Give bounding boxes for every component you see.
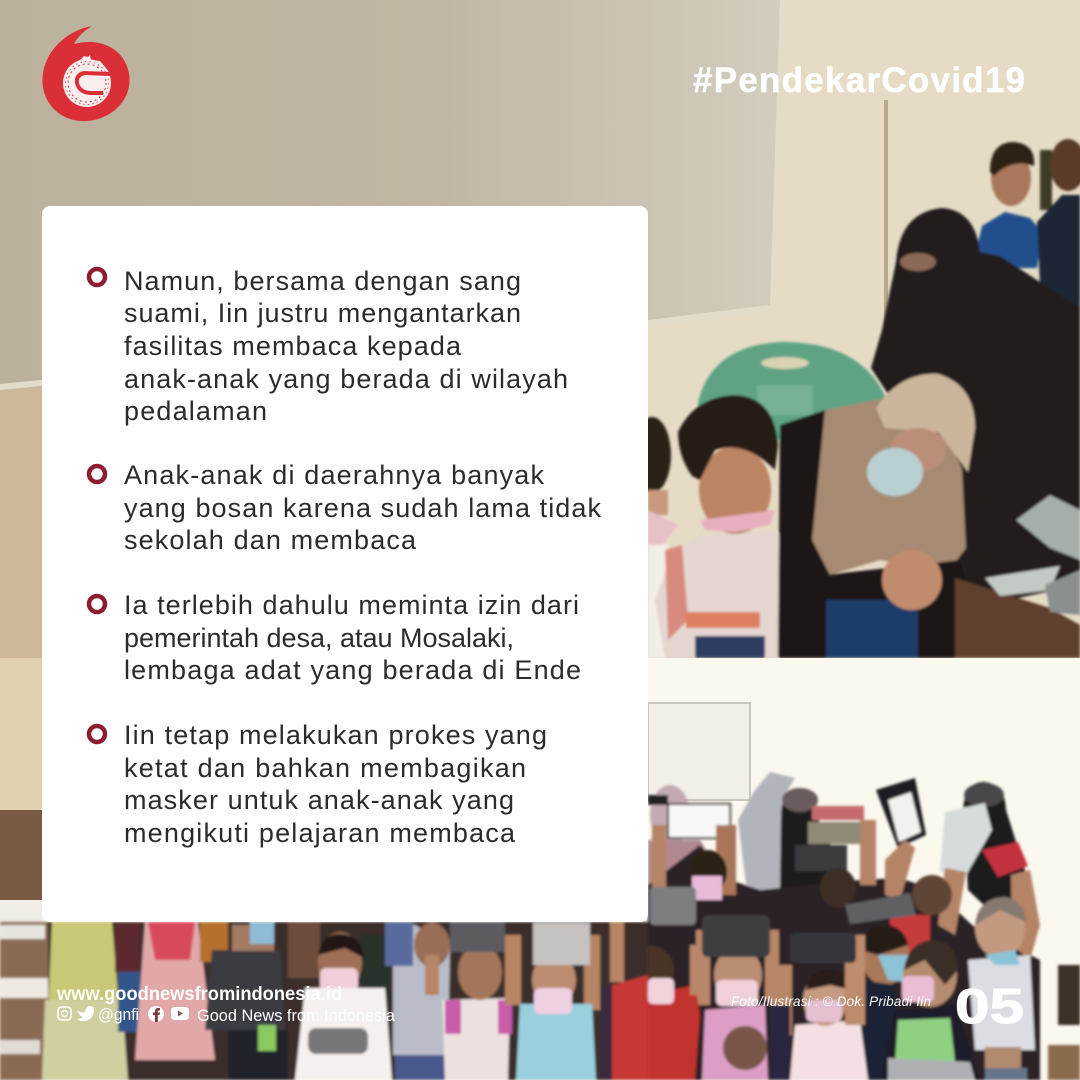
bullet point 4: masker untuk anak-anak yang bbox=[124, 785, 514, 815]
arms raised bbox=[716, 825, 736, 895]
woman in black hijab bbox=[871, 208, 1080, 610]
bullet point 3: Ia terlebih dahulu meminta izin dari bbox=[124, 590, 579, 620]
bullet point 3: pemerintah desa, atau Mosalaki, bbox=[124, 623, 514, 653]
hashtag title: #PendekarCovid19 bbox=[693, 61, 1025, 100]
footer: social media icons bbox=[58, 1006, 189, 1022]
left child bbox=[648, 415, 673, 493]
footer: youtube channel name: Good News from Indonesia bbox=[197, 1006, 396, 1025]
back row adults bbox=[738, 772, 795, 900]
left hijab child and tablet bbox=[650, 785, 690, 845]
faces back bbox=[689, 850, 727, 894]
bullet point 1: Namun, bersama dengan sang bbox=[124, 266, 521, 296]
bullet point 2 bbox=[89, 460, 602, 555]
panel: text card bbox=[42, 206, 648, 922]
logo: red Good News from Indonesia swirl bbox=[42, 26, 130, 121]
bullet point 1 bbox=[89, 266, 568, 426]
package row bbox=[650, 887, 696, 925]
bullet point 4: Iin tetap melakukan prokes yang bbox=[124, 720, 547, 750]
bullet point 1: suami, Iin justru mengantarkan bbox=[124, 298, 521, 328]
crowd mass bbox=[648, 845, 1040, 1080]
bullet point 4: mengikuti pelajaran membaca bbox=[124, 818, 516, 848]
footer: instagram handle: @gnfi bbox=[98, 1005, 139, 1024]
woman in beige hijab with mask bbox=[778, 410, 835, 658]
bullet point 1: fasilitas membaca kepada bbox=[124, 331, 462, 361]
red kid bbox=[648, 985, 700, 1080]
child in front bbox=[655, 530, 808, 658]
footer: website address: www.goodnewsfromindonesia.id bbox=[56, 984, 342, 1005]
bullet point 2: sekolah dan membaca bbox=[124, 525, 417, 555]
boy with blue mask bbox=[861, 925, 909, 985]
lilac girl bbox=[702, 1005, 768, 1080]
raised packages bbox=[876, 778, 926, 848]
green chair bbox=[698, 342, 885, 440]
bullet point 4: ketat dan bahkan membagikan bbox=[124, 753, 526, 783]
bullet point 3: lembaga adat yang berada di Ende bbox=[124, 655, 581, 685]
table with masks bbox=[955, 578, 1080, 658]
page number: 05 bbox=[955, 980, 1024, 1034]
children top right bbox=[990, 162, 1032, 208]
bullet point 2: yang bosan karena sudah lama tidak bbox=[124, 493, 602, 523]
bullet point 2: Anak-anak di daerahnya banyak bbox=[124, 460, 544, 490]
photo: classroom with whiteboard and woman with children bbox=[0, 0, 1080, 658]
chair right bbox=[1058, 965, 1080, 1025]
crowd left bbox=[0, 922, 648, 1080]
photo: group of children holding up gifts bbox=[0, 658, 1080, 1080]
photo credit: Foto/Ilustrasi : © Dok. Pribadi Iin bbox=[731, 994, 931, 1009]
kids right bbox=[968, 955, 1035, 1050]
green shirt kid bbox=[880, 1005, 980, 1080]
bullet point 1: pedalaman bbox=[124, 396, 267, 426]
bullet point 4 bbox=[89, 720, 547, 848]
pink child bbox=[790, 1020, 868, 1080]
bullet point 1: anak-anak yang berada di wilayah bbox=[124, 364, 568, 394]
bullet point 3 bbox=[89, 590, 581, 685]
